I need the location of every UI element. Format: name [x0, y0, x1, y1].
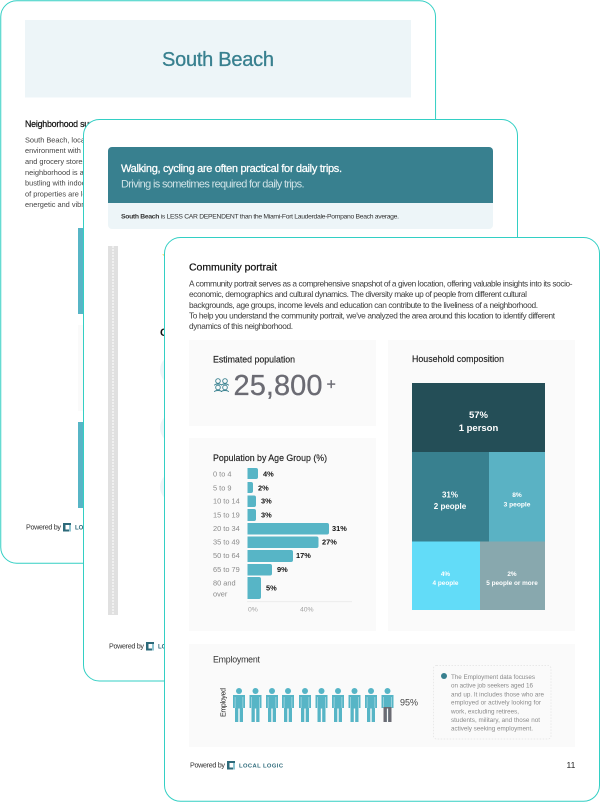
page 1: South Beach overview: [1, 1, 436, 563]
footer: powered by: LO: [75, 526, 84, 532]
panel: estimated population: [189, 340, 376, 426]
bar values: 4%: [263, 470, 274, 478]
population value: 25,800: [234, 370, 322, 402]
age labels: 20 to 34: [213, 524, 240, 533]
treemap: 2%: [507, 571, 517, 578]
bar values: 27%: [322, 538, 337, 546]
bar values: 9%: [277, 565, 288, 574]
neighborhood description: environment with a variety of shops: [25, 146, 141, 155]
treemap: [412, 383, 545, 610]
pictogram: 95% employed: [233, 688, 394, 722]
age labels: [213, 470, 240, 598]
treemap: 5 people or more: [486, 580, 538, 587]
neighborhood description: [25, 136, 141, 209]
axis label: employed: Employed: [220, 688, 228, 717]
neighborhood description: energetic and vibrant area: [25, 200, 112, 209]
treemap: 31%: [442, 490, 458, 500]
treemap: 2 people: [434, 502, 467, 511]
bar values: 17%: [296, 551, 311, 560]
intro paragraph: backgrounds, age groups, income levels and education can contribute to the liveliness of a neighborhood.: [189, 300, 538, 310]
neighborhood description: of properties are located nearby: [25, 190, 130, 198]
logo mark: [227, 761, 235, 770]
bar values: [258, 470, 347, 592]
age labels: 35 to 49: [213, 538, 240, 546]
treemap: 3 people: [504, 502, 531, 508]
bar values: 2%: [258, 484, 269, 492]
panel: estimated population: Estimated population: [213, 354, 295, 364]
neighborhood description: South Beach, located in the heart: [25, 136, 134, 144]
title banner: [25, 20, 411, 98]
treemap: 1 person: [459, 423, 498, 434]
panel: population by age group: Population by Age Group (%): [213, 453, 327, 463]
intro paragraph: [189, 278, 573, 331]
axis: [247, 601, 352, 614]
page 3: community portrait: [164, 238, 600, 801]
page 2: transport: [84, 120, 518, 681]
info note: on active job seekers aged 16: [451, 682, 533, 690]
car dependency callout: [108, 147, 493, 229]
treemap: 57%: [469, 410, 489, 421]
panel: employment: [189, 644, 575, 747]
footer: powered by: LO: [158, 644, 167, 650]
age labels: over: [213, 590, 228, 598]
treemap: 4 people: [433, 580, 459, 587]
footer: powered by: [109, 642, 167, 650]
info note: The Employment data focuses: [451, 674, 535, 681]
axis: 40%: [300, 606, 314, 614]
info note: actively seeking employment.: [451, 726, 533, 732]
neighborhood description: bustling with indoor and outdoor: [25, 178, 130, 188]
panel: population by age group: [189, 438, 376, 631]
neighborhood heading: Neighborhood summary: [25, 119, 116, 129]
section letter: C: [160, 327, 168, 339]
footer: powered by: Powered by: [26, 522, 61, 532]
car dependency callout: Driving is sometimes required for daily trips.: [121, 178, 304, 190]
intro paragraph: economic, demographics and cultural dynamics. The diversity make up of people from different cultural: [189, 289, 527, 299]
icon: people: [214, 379, 228, 392]
bar chart: [248, 468, 329, 599]
age labels: 5 to 9: [213, 484, 232, 492]
footer: powered by local logic: Powered by: [190, 760, 225, 770]
road graphic: [108, 246, 118, 615]
age labels: 65 to 79: [213, 565, 240, 574]
bar values: 5%: [266, 584, 277, 592]
intro paragraph: dynamics of this neighborhood.: [189, 321, 293, 331]
intro paragraph: A community portrait serves as a comprehensive snapshot of a given location, offering valuable insights into its socio-: [189, 278, 573, 288]
panel: middle: [78, 325, 98, 411]
chart bar: upper: [78, 228, 98, 314]
footer: powered by local logic: LOCAL LOGIC: [239, 764, 284, 770]
icon: star: [162, 250, 174, 261]
page number: 11: [566, 760, 576, 770]
car dependency callout: Walking, cycling are often practical for daily trips.: [121, 163, 342, 175]
neighborhood description: neighborhood is a lively district: [25, 168, 126, 177]
value: 95%: 95%: [400, 698, 418, 708]
info note: [434, 666, 551, 739]
age labels: 15 to 19: [213, 510, 240, 520]
icon circles: [160, 355, 190, 502]
age labels: 50 to 64: [213, 551, 240, 560]
treemap: 8%: [512, 492, 522, 499]
bar values: 31%: [332, 524, 347, 533]
car dependency callout: South Beach is LESS CAR DEPENDENT than the Miami-Fort Lauderdale-Pompano Beach average.: [121, 214, 399, 220]
bar values: 3%: [261, 510, 272, 520]
chart bar: lower: [78, 422, 98, 508]
intro paragraph: To help you understand the community portrait, we've analyzed the area around this location to identify different: [189, 310, 556, 320]
age labels: 80 and: [213, 578, 236, 588]
neighborhood description: and grocery stores within walking: [25, 157, 134, 166]
title banner: South Beach: [162, 49, 274, 71]
info note: students, military, and those not: [451, 717, 540, 724]
axis: 0%: [248, 606, 258, 614]
bar values: 3%: [261, 496, 272, 506]
info note: work, excluding retirees,: [450, 708, 519, 716]
heading: community portrait: Community portrait: [189, 262, 277, 274]
age labels: 0 to 4: [213, 470, 232, 478]
info note: and up. It includes those who are: [451, 692, 544, 698]
footer: powered by local logic: [190, 760, 284, 770]
panel: household composition: Household composition: [412, 354, 504, 364]
panel: employment: Employment: [213, 654, 261, 664]
footer: powered by: [26, 522, 84, 532]
footer: powered by: Powered by: [109, 642, 144, 650]
info note: employed or actively looking for: [451, 700, 541, 706]
treemap: 4%: [441, 571, 450, 578]
panel: household composition: [388, 340, 575, 631]
age labels: 10 to 14: [213, 496, 240, 506]
plus sign: +: [326, 376, 336, 394]
